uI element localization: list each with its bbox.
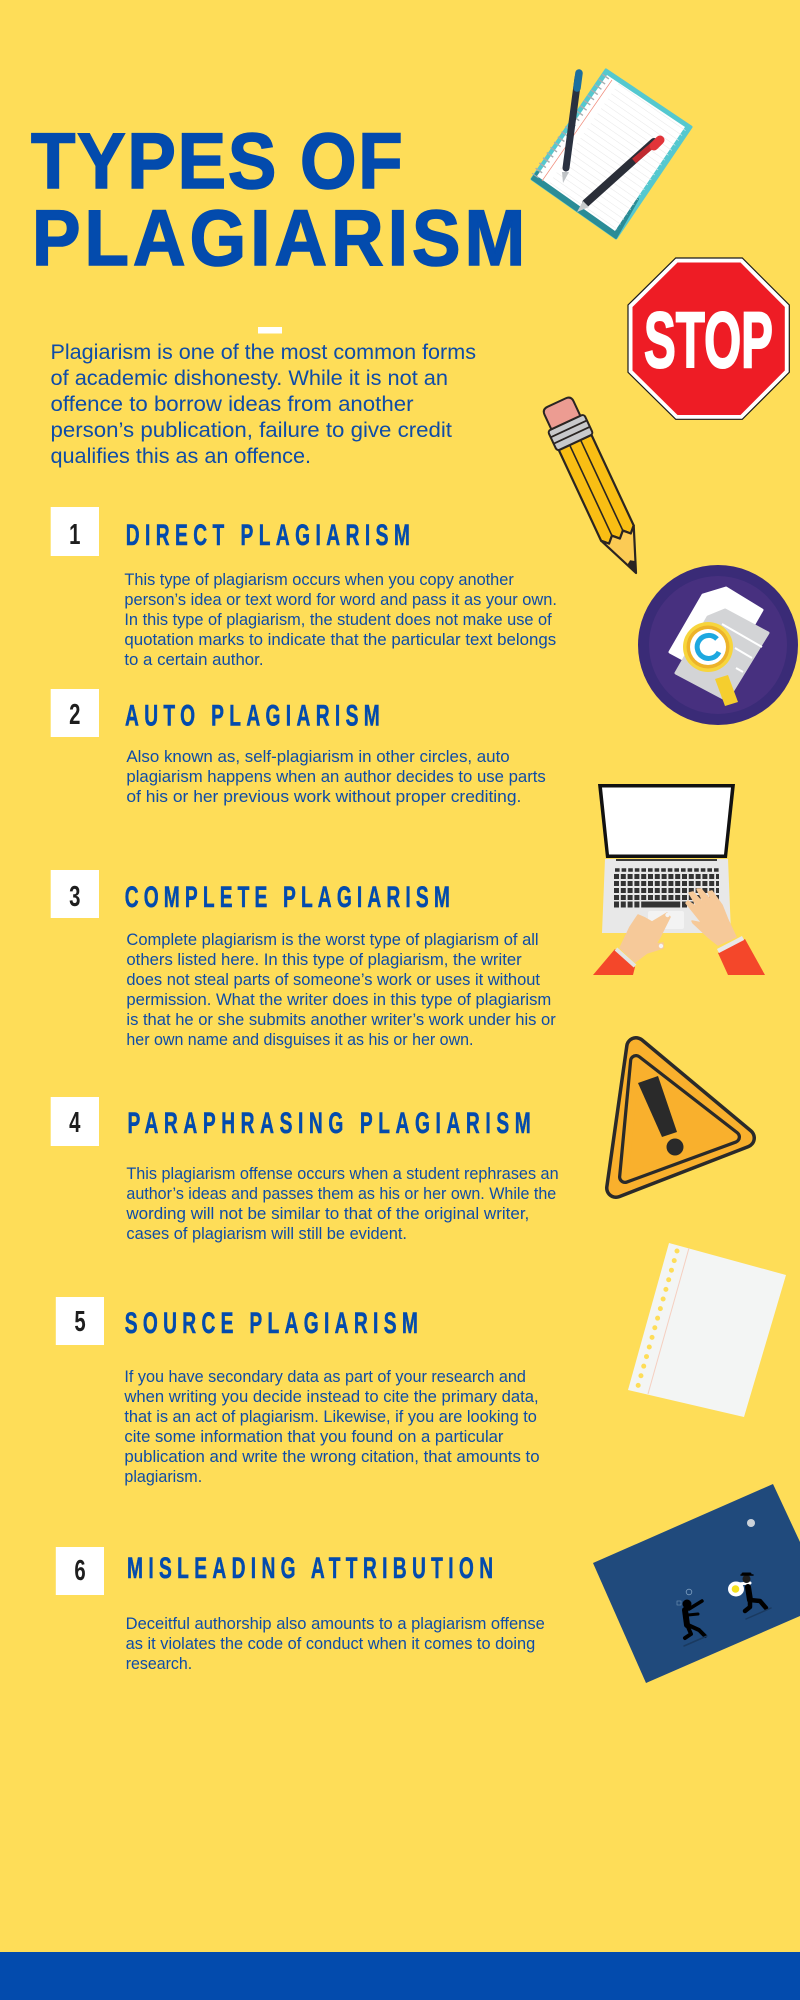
heading: direct plagiarism: DIRECT PLAGIARISM: [126, 519, 410, 552]
heading: source plagiarism: SOURCE PLAGIARISM: [125, 1307, 418, 1340]
number badge 3: 3: [69, 881, 81, 913]
title: PLAGIARISM: [32, 194, 525, 283]
text: direct plagiarism: [124, 571, 557, 669]
number badge 4: [51, 1097, 99, 1146]
text: source plagiarism: cite some information that you found on a particular: [124, 1428, 504, 1446]
text: auto plagiarism: plagiarism happens when an author decides to use parts: [126, 768, 546, 786]
intro paragraph: [50, 340, 476, 468]
text: complete plagiarism: permission. What the writer does in this type of plagiarism: [126, 991, 551, 1009]
text: complete plagiarism: Complete plagiarism is the worst type of plagiarism of all: [126, 931, 539, 949]
panel: direct plagiarism: [51, 507, 557, 669]
icon: magnifier over documents badge: [638, 565, 798, 725]
intro paragraph: of academic dishonesty. While it is not an: [50, 366, 448, 390]
number badge 6: 6: [74, 1555, 86, 1587]
white dash accent: [258, 327, 282, 334]
text: complete plagiarism: is that he or she submits another writer’s work under his or: [126, 1011, 556, 1029]
icon: stop sign: [628, 258, 789, 419]
text: complete plagiarism: her own name and disguises it as his or her own.: [126, 1031, 474, 1049]
intro paragraph: Plagiarism is one of the most common forms: [50, 340, 476, 364]
number badge 2: [51, 689, 99, 737]
text: complete plagiarism: others listed here. In this type of plagiarism, the writer: [126, 951, 522, 969]
text: auto plagiarism: of his or her previous work without proper crediting.: [126, 788, 521, 806]
title: TYPES OF: [31, 117, 403, 206]
red pen: [577, 140, 660, 212]
footer bar: [0, 1952, 800, 2000]
keyboard: [614, 870, 719, 908]
heading: complete plagiarism: COMPLETE PLAGIARISM: [125, 881, 450, 914]
text: misleading attribution: research.: [126, 1655, 192, 1673]
heading: paraphrasing plagiarism: PARAPHRASING PLAGIARISM: [128, 1107, 531, 1140]
heading: misleading attribution: MISLEADING ATTRIBUTION: [127, 1552, 493, 1585]
text: auto plagiarism: Also known as, self-plagiarism in other circles, auto: [126, 748, 510, 766]
icon: notebook and pens: [532, 70, 691, 238]
text: source plagiarism: [123, 1368, 540, 1486]
text: direct plagiarism: quotation marks to indicate that the particular text belongs: [124, 631, 556, 649]
number badge 5: 5: [74, 1306, 86, 1338]
icon: loose notebook paper: [628, 1243, 786, 1417]
text: source plagiarism: publication and write the wrong citation, that amounts to: [124, 1448, 540, 1466]
panel: complete plagiarism: [51, 870, 556, 1049]
text: complete plagiarism: does not steal parts of someone’s work or uses it without: [126, 971, 540, 989]
icon: pencil: [538, 394, 654, 581]
panel: auto plagiarism: [51, 689, 546, 806]
icon: warning triangle: [616, 1047, 745, 1188]
text: paraphrasing plagiarism: author’s ideas and passes them as his or her own. While the: [126, 1185, 556, 1203]
intro paragraph: offence to borrow ideas from another: [50, 392, 414, 416]
intro paragraph: qualifies this as an offence.: [50, 444, 311, 468]
number badge 3: [51, 870, 99, 918]
panel: source plagiarism: [56, 1297, 540, 1486]
text: paraphrasing plagiarism: cases of plagiarism will still be evident.: [126, 1225, 407, 1243]
left hand and sleeve: [593, 913, 670, 975]
text: source plagiarism: when writing you decide instead to cite the primary data,: [123, 1388, 539, 1406]
intro paragraph: person’s publication, failure to give credit: [50, 418, 452, 442]
text: paraphrasing plagiarism: This plagiarism offense occurs when a student rephrases an: [126, 1165, 559, 1183]
heading: auto plagiarism: AUTO PLAGIARISM: [125, 699, 380, 733]
number badge 6: [56, 1547, 104, 1595]
text: source plagiarism: that is an act of plagiarism. Likewise, if you are looking to: [124, 1408, 537, 1426]
icon: idea thief illustration: [593, 1484, 800, 1683]
figure: victim: [677, 1589, 707, 1646]
text: paraphrasing plagiarism: wording will not be similar to that of the original writer,: [125, 1205, 529, 1223]
title: [31, 117, 525, 283]
text: misleading attribution: [126, 1615, 545, 1673]
text: direct plagiarism: person’s idea or text word for word and pass it as your own.: [124, 591, 557, 609]
right hand and sleeve: [686, 889, 765, 975]
text: direct plagiarism: In this type of plagiarism, the student does not make use of: [124, 611, 552, 629]
text: direct plagiarism: This type of plagiarism occurs when you copy another: [124, 571, 514, 589]
panel: misleading attribution: [56, 1547, 545, 1673]
number badge 1: 1: [69, 519, 81, 551]
text: source plagiarism: plagiarism.: [124, 1468, 202, 1486]
number badge 2: 2: [69, 699, 80, 731]
figure: thief with idea: [728, 1574, 771, 1619]
text: misleading attribution: as it violates the code of conduct when it comes to doing: [126, 1635, 535, 1653]
panel: paraphrasing plagiarism: [51, 1097, 559, 1243]
text: source plagiarism: If you have secondary data as part of your research and: [124, 1368, 526, 1386]
blue pen: [562, 73, 579, 183]
icon: laptop with hands: [593, 784, 765, 975]
text: paraphrasing plagiarism: [125, 1165, 559, 1243]
text: auto plagiarism: [126, 748, 546, 806]
number badge 1: [51, 507, 99, 556]
text: complete plagiarism: [126, 931, 556, 1049]
text: direct plagiarism: to a certain author.: [124, 651, 264, 669]
number badge 4: 4: [69, 1107, 81, 1139]
number badge 5: [56, 1297, 104, 1345]
text: misleading attribution: Deceitful authorship also amounts to a plagiarism offense: [126, 1615, 545, 1633]
